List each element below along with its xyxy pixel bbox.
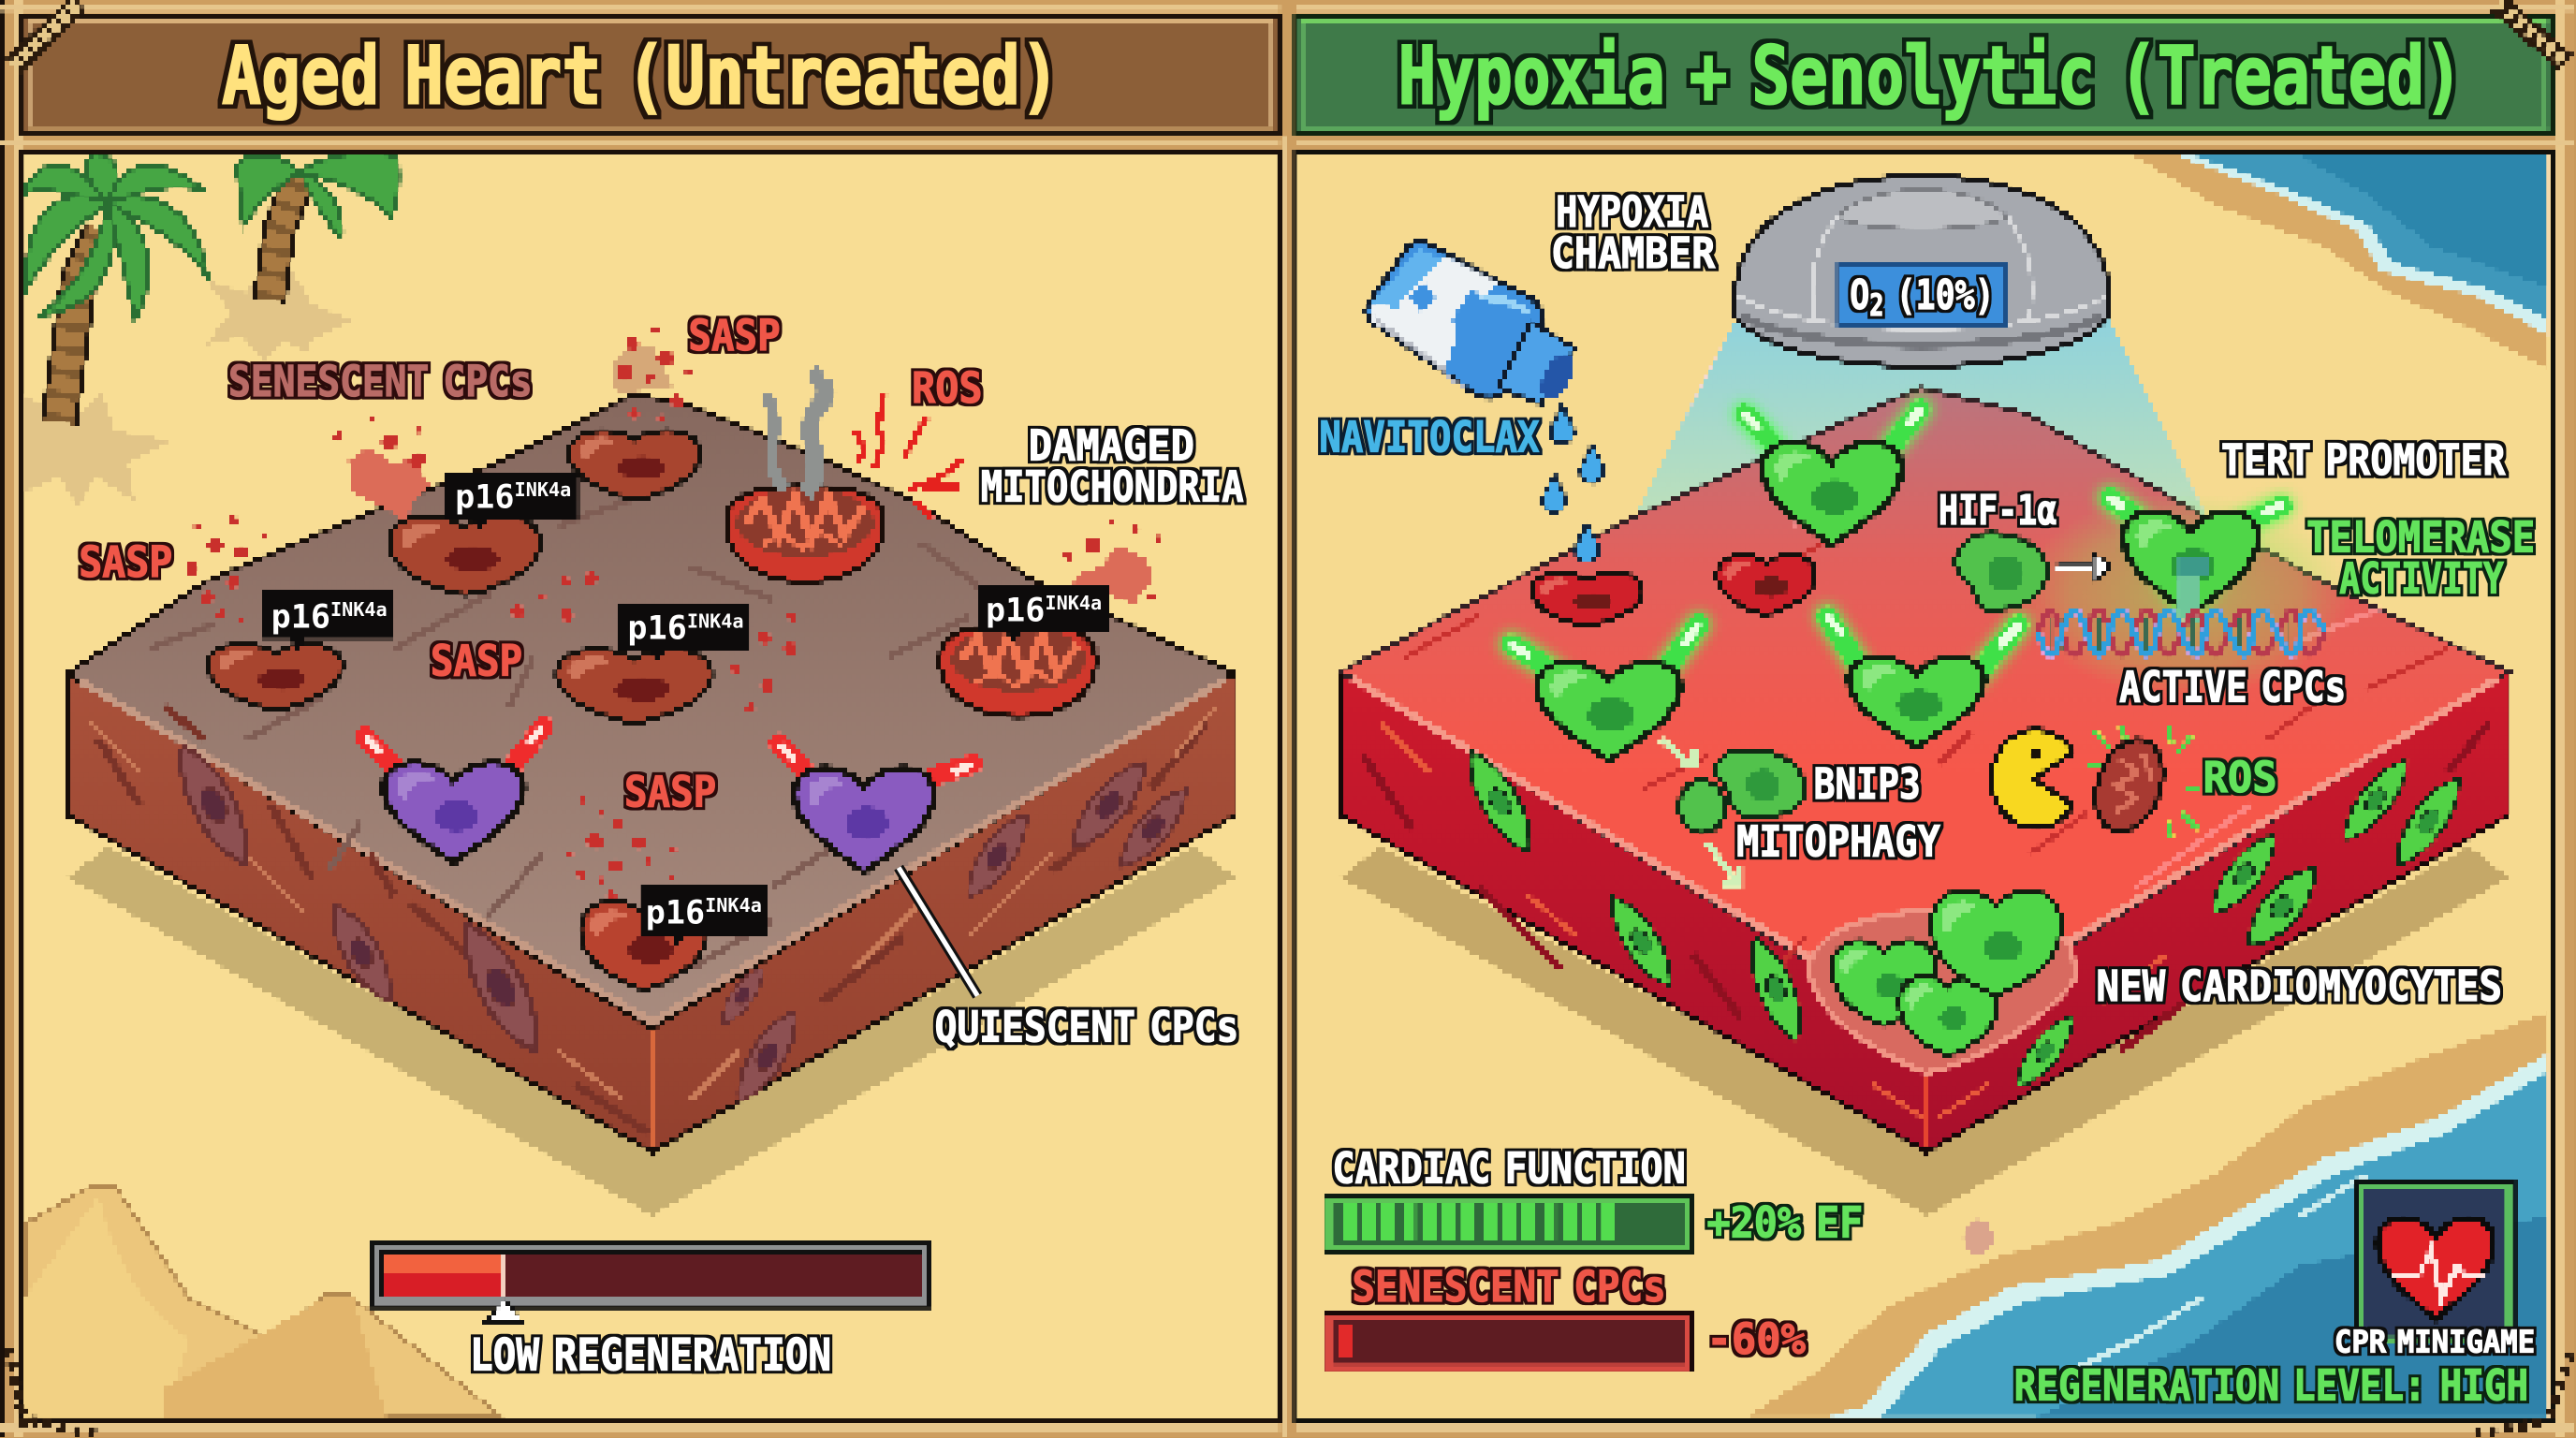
value: plus 20 percent EF: +20% EF <box>1707 1198 1863 1248</box>
tissue block: aged <box>67 394 1236 1152</box>
label: CPR minigame: CPR MINIGAME <box>2334 1323 2535 1359</box>
HIF-1 alpha blob and arrow <box>1955 534 2111 609</box>
label: new cardiomyocytes: NEW CARDIOMYOCYTES <box>2097 961 2502 1011</box>
label: telomerase activity <box>2306 513 2535 604</box>
p16 tag text 5: INK4a <box>705 894 762 917</box>
title: aged heart: Aged Heart (Untreated) <box>222 30 1060 124</box>
label: O2 10 percent: 2 <box>1869 289 1883 323</box>
p16 tag backgrounds <box>263 472 1109 948</box>
senescent CPC hearts <box>208 431 711 990</box>
block shadow <box>1340 846 2509 1216</box>
label: SASP centre: SASP <box>431 636 522 685</box>
navitoclax drops <box>1543 404 1603 562</box>
label: ROS treated: ROS <box>2203 753 2277 802</box>
low regeneration bar <box>372 1242 929 1323</box>
stat bar: cardiac function <box>1325 1196 1692 1251</box>
panel: untreated <box>23 153 1278 1419</box>
glow around TERT cell <box>2021 493 2349 697</box>
p16 tag text 1: p16 <box>455 477 515 516</box>
panel: treated <box>1296 153 2552 1419</box>
hypoxia chamber <box>1734 176 2110 366</box>
callout line: quiescent <box>899 868 977 996</box>
label: TERT promoter: TERT PROMOTER <box>2221 435 2506 485</box>
label: cardiac function: CARDIAC FUNCTION <box>1332 1144 1686 1194</box>
header: aged heart banner <box>23 17 1278 135</box>
ROS sparks <box>2086 725 2198 838</box>
palm tree large <box>23 154 207 422</box>
smoke <box>766 372 827 493</box>
tissue block: treated <box>1340 388 2509 1152</box>
damaged mitochondrion: upper <box>726 487 884 581</box>
block shadow <box>67 846 1236 1216</box>
sand dunes <box>24 1186 501 1416</box>
palm tree small <box>237 154 399 301</box>
p16 tag text 2: INK4a <box>330 598 388 621</box>
label: telomerase activity: ACTIVITY <box>2339 554 2504 604</box>
damaged mitochondrion: right <box>940 624 1096 716</box>
active CPC hearts <box>1537 442 2259 761</box>
label: damaged mitochondria: DAMAGED <box>1029 420 1194 470</box>
quiescent CPC hearts <box>365 726 973 873</box>
navitoclax bottle <box>1367 242 1581 404</box>
value: minus 60 percent: -60% <box>1707 1314 1806 1364</box>
sea: top right <box>2134 156 2548 370</box>
p16 tag text 4: INK4a <box>1045 592 1102 614</box>
label: hypoxia chamber: HYPOXIA <box>1556 187 1708 237</box>
p16 tag text 4: p16 <box>986 591 1045 629</box>
DNA helix <box>2039 610 2324 654</box>
label: low regeneration: LOW REGENERATION <box>470 1330 831 1382</box>
CPR minigame tile <box>2356 1183 2513 1343</box>
mitophagy arrows <box>1661 740 1740 884</box>
label: SASP left: SASP <box>79 537 172 587</box>
label: active CPCs: ACTIVE CPCs <box>2119 662 2346 712</box>
p16 tag text 5: p16 <box>646 893 705 932</box>
BNIP3 mitophagy blob <box>1679 750 1806 833</box>
TERT promoter pin <box>2178 555 2208 621</box>
label: BNIP3: BNIP3 <box>1814 759 1921 809</box>
SASP splashes <box>348 345 1153 605</box>
ROS bolts <box>856 394 962 520</box>
label: telomerase activity: TELOMERASE <box>2306 513 2535 563</box>
label: senescent CPCs stat: SENESCENT CPCs <box>1352 1262 1666 1312</box>
header: treated banner <box>1296 17 2552 135</box>
p16 tag text 1: INK4a <box>515 478 571 501</box>
label: O2 10 percent: (10%) <box>1883 271 1995 319</box>
label: quiescent CPCs: QUIESCENT CPCs <box>935 1003 1238 1052</box>
active CPC glow <box>1512 409 2282 677</box>
label: mitophagy: MITOPHAGY <box>1736 816 1940 866</box>
label: SASP top: SASP <box>688 311 781 360</box>
label: HIF-1 alpha: HIF-1α <box>1939 487 2056 535</box>
palm shadows <box>23 263 353 509</box>
pacman <box>1991 729 2073 829</box>
pebble <box>1963 1219 1993 1255</box>
p16 tag text 3: p16 <box>627 609 687 648</box>
label: ROS: ROS <box>912 363 983 413</box>
label: hypoxia chamber: CHAMBER <box>1551 228 1716 278</box>
SASP particles <box>185 327 1162 901</box>
label: senescent CPCs: SENESCENT CPCs <box>228 357 533 406</box>
label: hypoxia chamber <box>1551 187 1716 278</box>
label: damaged mitochondria <box>981 420 1244 511</box>
sea: bottom right <box>1748 1012 2548 1416</box>
new cardiomyocyte hearts <box>1832 890 2061 1055</box>
damaged mitochondrion being eaten <box>2084 730 2174 841</box>
p16 tag text 3: INK4a <box>687 609 744 632</box>
label: damaged mitochondria: MITOCHONDRIA <box>981 462 1244 511</box>
active CPC antennae <box>1512 409 2282 677</box>
label: O2 10 percent: O <box>1850 271 1875 319</box>
label: SASP lower: SASP <box>624 768 716 817</box>
p16 tag text 2: p16 <box>271 597 330 636</box>
pocket: new cardiomyocytes <box>1808 910 2074 1073</box>
hypoxia light cone <box>1630 320 2211 526</box>
stat bar: senescent CPCs <box>1325 1313 1692 1371</box>
label: navitoclax: NAVITOCLAX <box>1319 413 1540 462</box>
senescent hearts remaining <box>1531 555 1815 626</box>
